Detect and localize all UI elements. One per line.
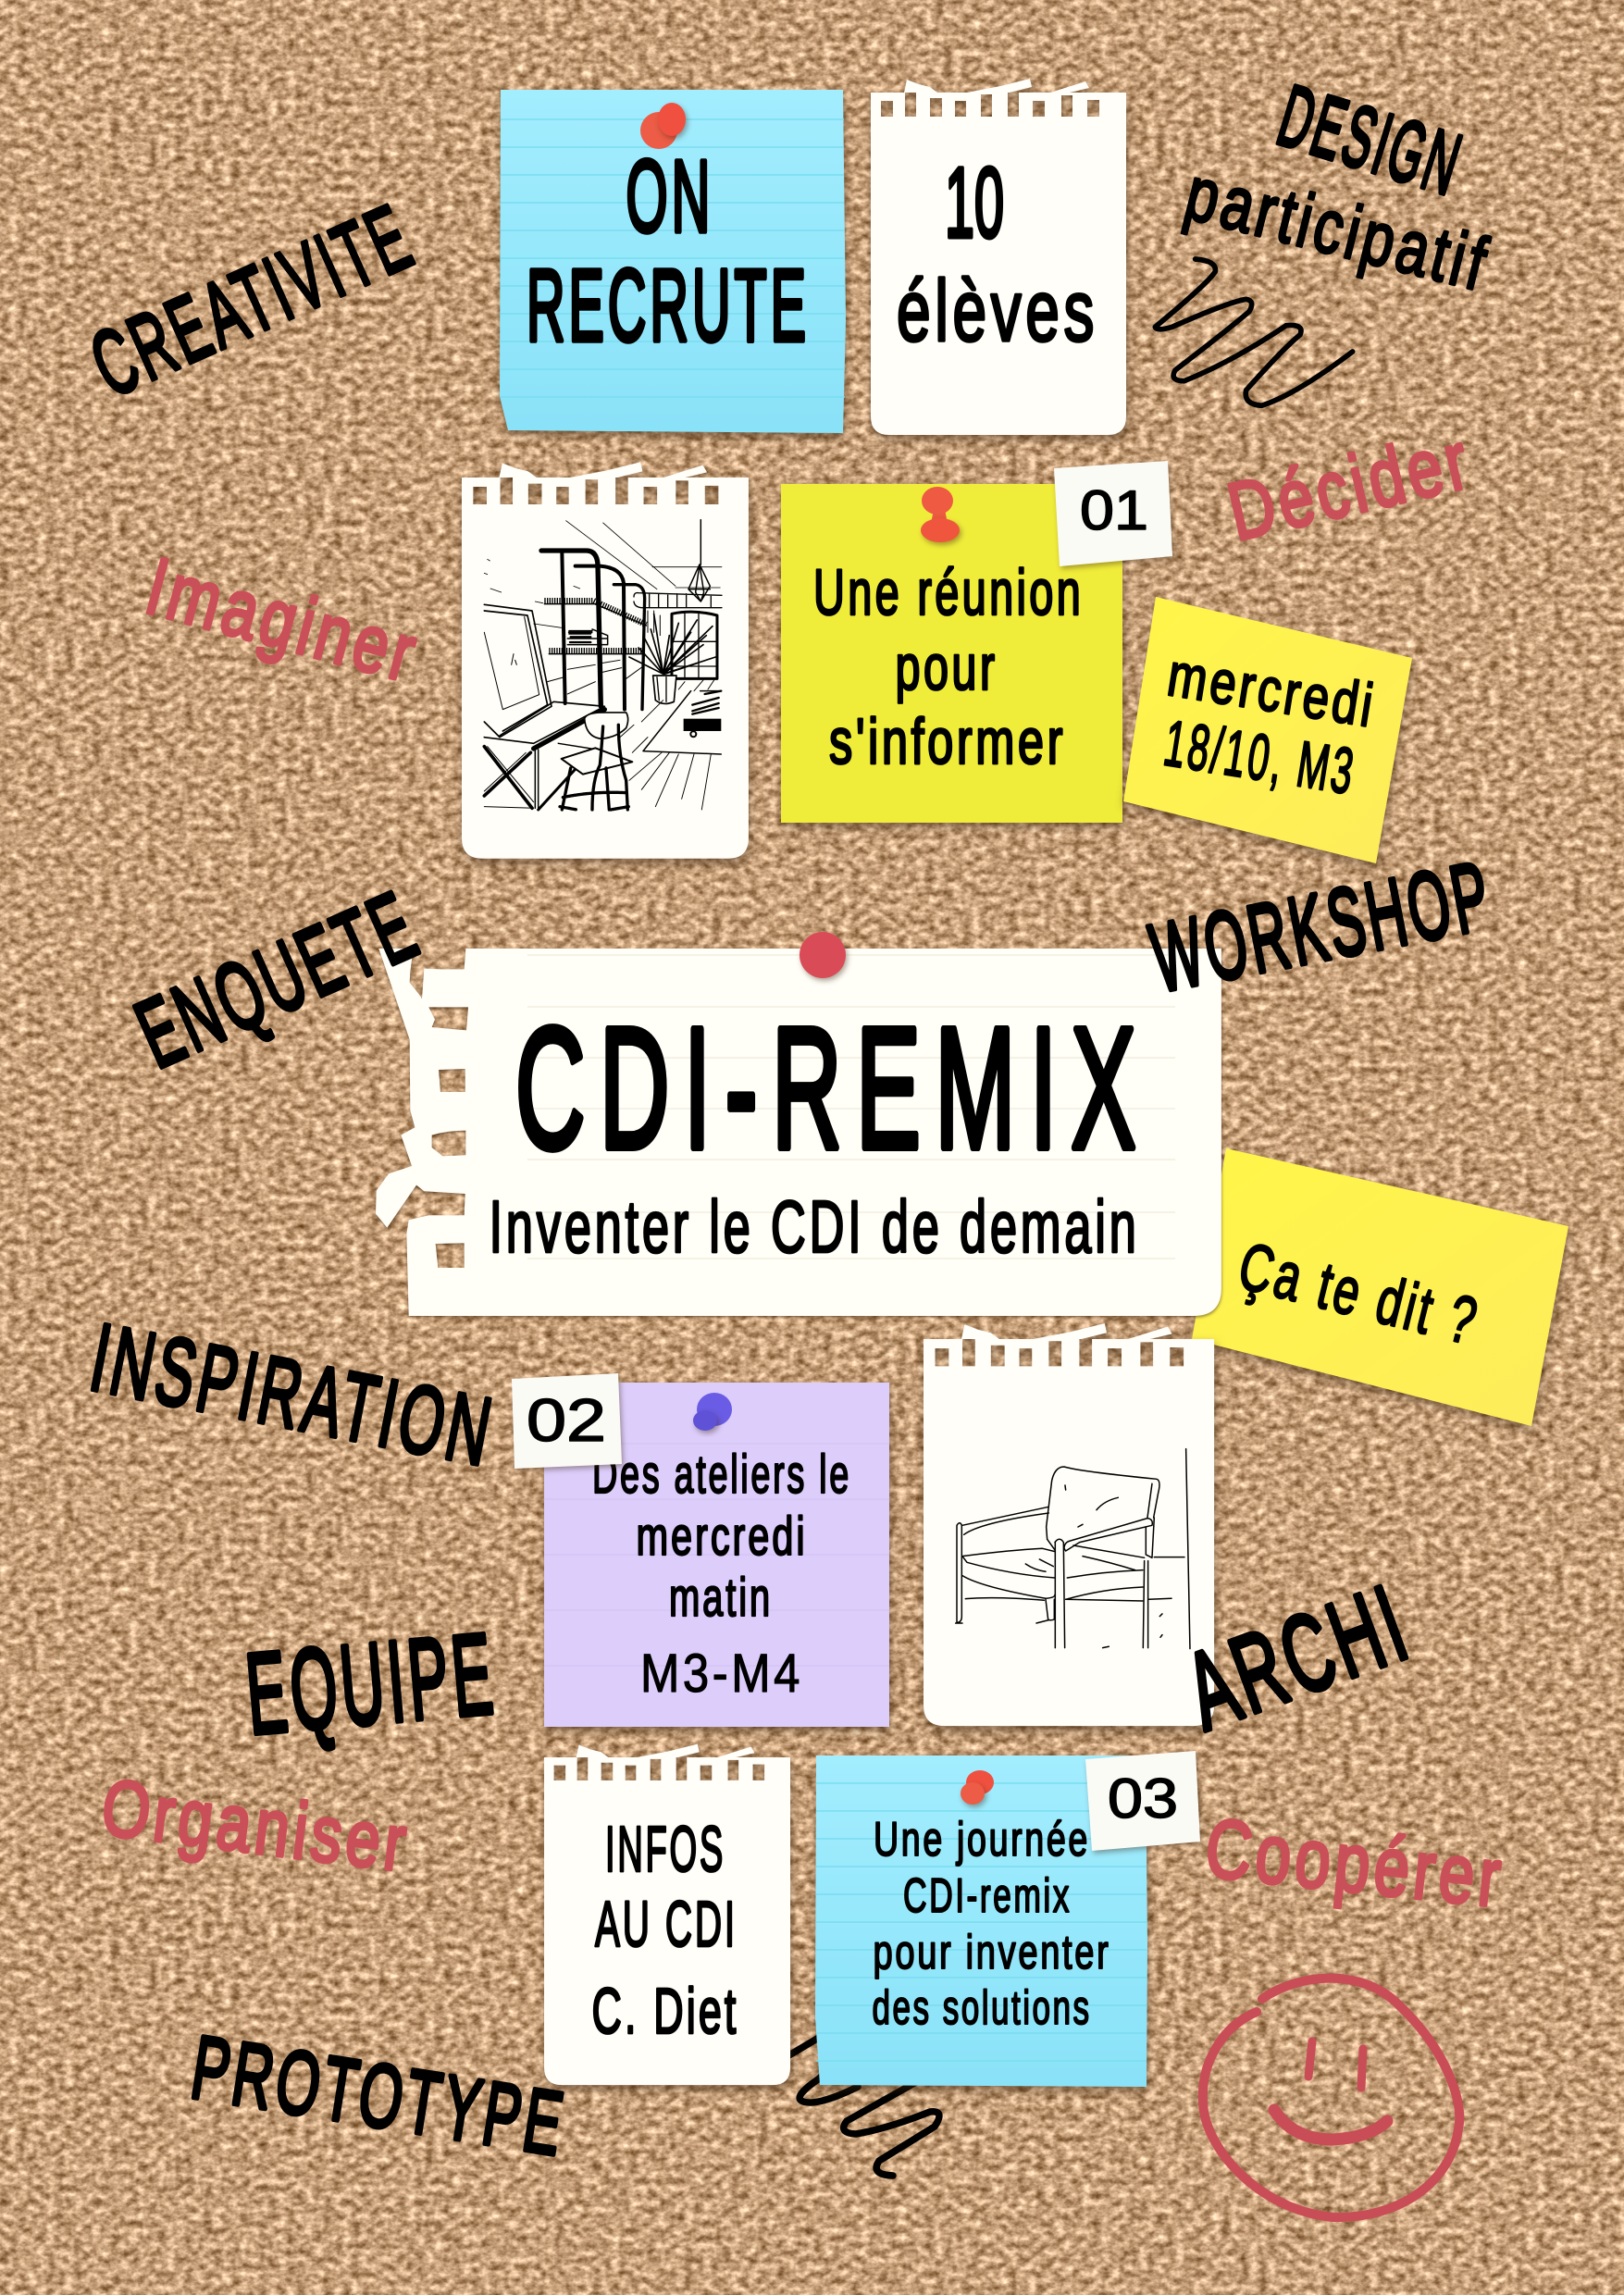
word: imaginer: Imaginer (137, 540, 429, 700)
text: M3-M4: M3-M4 (640, 1644, 803, 1704)
icon: red pin (921, 487, 960, 542)
word: creativite: CREATIVITE (77, 184, 428, 416)
word: equipe: EQUIPE (242, 1609, 502, 1758)
text: au cdi: AU CDI (595, 1888, 738, 1960)
text: mercredi: mercredi (1163, 639, 1381, 740)
word: prototype: PROTOTYPE (185, 2016, 573, 2175)
torn white paper (871, 79, 1126, 435)
note: journée cdi-remix (815, 1755, 1147, 2087)
text: élèves: élèves (897, 262, 1098, 359)
text: pour inventer: pour inventer (874, 1926, 1110, 1979)
white label (1054, 461, 1172, 566)
icon: purple pin (693, 1393, 732, 1431)
torn white paper (924, 1323, 1214, 1726)
note: mercredi 18/10, M3 (1123, 597, 1412, 863)
blue sticky paper (500, 90, 846, 433)
icon: red pin (961, 1770, 994, 1805)
heading: recrute: RECRUTE (527, 249, 810, 363)
text: des ateliers le: Des ateliers le (592, 1445, 851, 1505)
number 02: 02 (527, 1386, 606, 1454)
text: mercredi: mercredi (637, 1507, 807, 1567)
text: ça te dit ?: Ça te dit ? (1232, 1229, 1487, 1359)
main title note (376, 932, 1221, 1316)
word: coopérer: Coopérer (1201, 1802, 1509, 1926)
number 03: 03 (1108, 1768, 1178, 1830)
text: cdi-remix: CDI-remix (903, 1869, 1072, 1923)
title: CDI-REMIX: CDI-REMIX (515, 993, 1150, 1185)
note: une réunion pour s'informer (781, 484, 1122, 823)
word: archi: ARCHI (1171, 1561, 1425, 1754)
torn white paper (462, 462, 749, 859)
number 01: 01 (1080, 479, 1148, 541)
note: sketch of interior (462, 462, 749, 859)
note: on recrute (500, 90, 846, 433)
icon: hand-drawn smiley (1203, 1979, 1459, 2217)
text: c. diet: C. Diet (592, 1975, 738, 2047)
yellow tilted paper (1192, 1148, 1568, 1426)
subtitle: Inventer le CDI de demain (489, 1185, 1140, 1268)
tag: 03 (1085, 1751, 1200, 1851)
text: 18/10, M3: 18/10, M3 (1159, 707, 1361, 808)
blue sticky paper (815, 1755, 1147, 2087)
illustration: library interior (484, 520, 722, 810)
tag: 01 (1054, 461, 1172, 566)
purple sticky paper (544, 1383, 889, 1727)
heading: on: ON (626, 140, 714, 254)
word: décider: Décider (1220, 413, 1481, 558)
note: ateliers (544, 1383, 889, 1727)
word: inspiration: INSPIRATION (82, 1304, 502, 1487)
scribble: top right (1155, 259, 1353, 405)
text: infos: INFOS (605, 1813, 725, 1885)
white label (512, 1373, 622, 1469)
text: matin: matin (669, 1568, 773, 1628)
word: enquete: ENQUETE (121, 871, 434, 1088)
icon: round red pin (800, 932, 846, 978)
text: une réunion: Une réunion (813, 556, 1084, 628)
word: participatif: participatif (1178, 151, 1498, 307)
yellow sticky paper (781, 484, 1122, 823)
yellow tilted paper (1123, 597, 1412, 863)
note: chair sketch (924, 1323, 1214, 1726)
text: des solutions: des solutions (872, 1981, 1092, 2035)
text: une journée: Une journée (874, 1813, 1090, 1867)
note: ça te dit (1192, 1148, 1568, 1426)
note: 10 élèves (871, 79, 1126, 435)
torn white paper (544, 1744, 790, 2085)
white label (1085, 1751, 1200, 1851)
word: organiser: Organiser (97, 1763, 415, 1889)
note: infos au cdi (544, 1744, 790, 2085)
text: s'informer: s'informer (829, 705, 1066, 777)
icon: red pin (640, 103, 686, 149)
text: pour: pour (896, 631, 998, 703)
scribble: bottom (787, 2027, 939, 2176)
illustration: armchair (956, 1449, 1190, 1649)
torn paper with punched holes (376, 949, 1221, 1316)
tag: 02 (512, 1373, 622, 1469)
number 10: 10 (945, 146, 1004, 258)
